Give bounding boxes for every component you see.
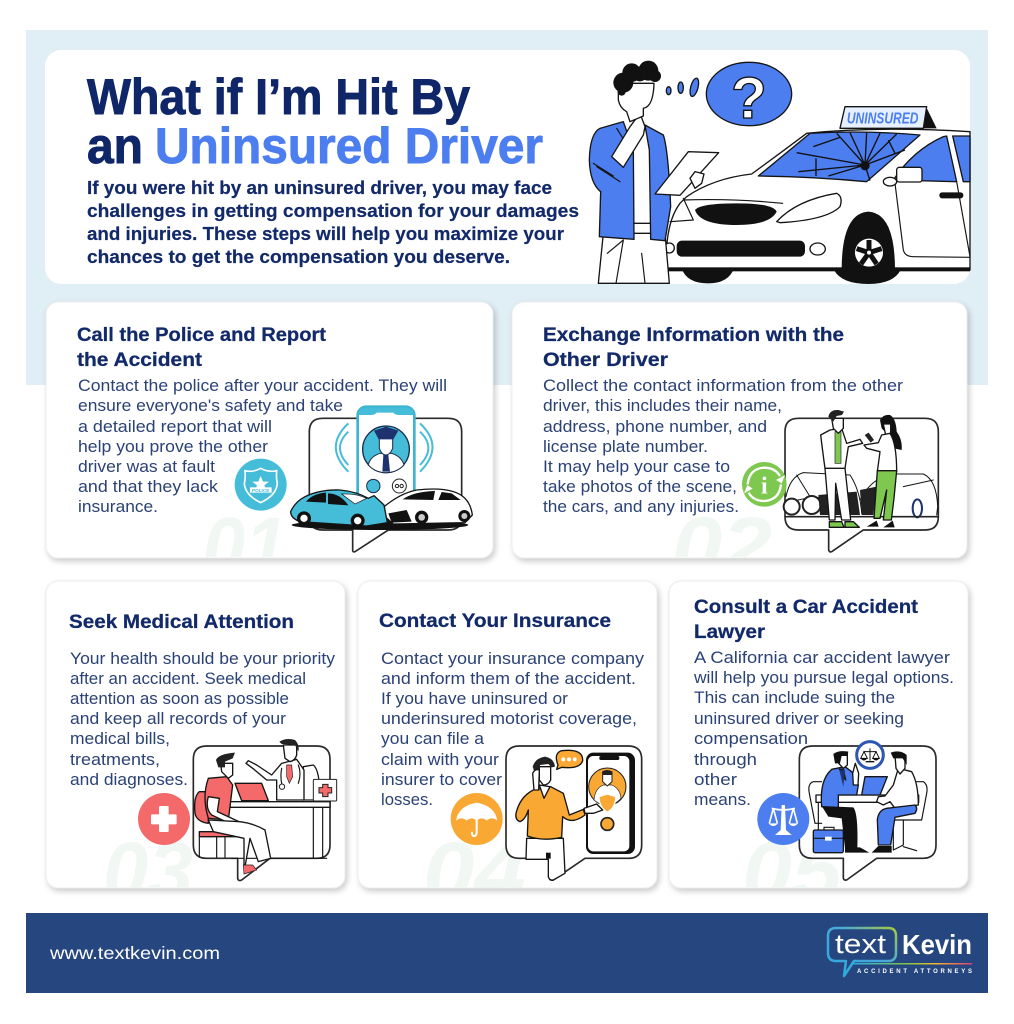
heading: Seek Medical Attention (69, 611, 294, 633)
illustration: doctor and patient at desk (193, 739, 337, 881)
person (589, 61, 719, 283)
icon: police badge: POLICE (252, 488, 269, 493)
uninsured sign: UNINSURED (847, 111, 919, 128)
body text: treatments, (70, 750, 160, 769)
body text: license plate number. (543, 437, 708, 456)
panel: step 3 seek medical attention (46, 581, 345, 917)
heading (543, 324, 844, 371)
body text: other (694, 770, 737, 789)
body text: claim with your (381, 750, 499, 769)
body text: and inform them of the accident. (381, 669, 636, 688)
intro text: chances to get the compensation you deserve. (87, 247, 510, 267)
panel: step 2 exchange information (512, 302, 967, 592)
body text (381, 649, 645, 809)
body text: help you prove the other (78, 437, 268, 456)
heading: Contact Your Insurance (379, 610, 611, 632)
heading: the Accident (77, 349, 203, 371)
body text: a detailed report that will (78, 417, 272, 436)
illustration: driver and damaged uninsured car (589, 61, 970, 284)
body text: It may help your case to (543, 457, 730, 476)
body text: uninsured driver or seeking (694, 709, 904, 728)
icon: information exchange (742, 462, 787, 507)
icon: police badge (235, 459, 287, 511)
illustration: lawyer meeting client (799, 742, 936, 880)
body text: and diagnoses. (70, 770, 188, 789)
body text: underinsured motorist coverage, (381, 709, 637, 728)
step number 03: 03 (103, 826, 193, 917)
logo: ACCIDENT ATTORNEYS (857, 969, 972, 975)
thought bubble with question mark: ? (731, 66, 767, 131)
step number 05: 05 (742, 826, 844, 917)
heading (694, 596, 919, 643)
body text: Your health should be your priority (70, 649, 336, 668)
body text (70, 649, 336, 789)
heading: Consult a Car Accident (694, 596, 919, 618)
body text: take photos of the scene, (543, 477, 737, 496)
step number 02: 02 (672, 501, 772, 592)
step number 01: 01 (203, 501, 287, 592)
heading: Exchange Information with the (543, 324, 844, 346)
illustration: two drivers exchanging information (784, 410, 938, 552)
heading: Lawyer (694, 621, 765, 643)
body text: A California car accident lawyer (694, 648, 950, 667)
intro text: challenges in getting compensation for your damages (87, 201, 579, 221)
body text: losses. (381, 790, 433, 809)
logo: text (835, 929, 887, 959)
body text (78, 376, 447, 516)
thought bubble with question mark (666, 62, 792, 131)
icon: information exchange: i (761, 473, 768, 499)
step number 04: 04 (423, 826, 526, 917)
body text: through (694, 750, 757, 769)
body text: address, phone number, and (543, 417, 767, 436)
title: Uninsured Driver (155, 118, 543, 174)
body text: attention as soon as possible (70, 689, 289, 708)
title: What if I’m Hit By (87, 69, 470, 125)
logo (828, 928, 972, 976)
intro text: If you were hit by an uninsured driver, you may face (87, 178, 552, 198)
logo: Kevin (902, 929, 972, 960)
illustration: police phone call and crashed cars (291, 407, 472, 552)
body text: compensation (694, 729, 808, 748)
body text: Contact the police after your accident. They will (78, 376, 447, 395)
light blue background panel (26, 30, 988, 385)
body text: medical bills, (70, 729, 170, 748)
body text: Contact your insurance company (381, 649, 645, 668)
icon: scales of justice (757, 793, 809, 845)
body text: and that they lack (78, 477, 219, 496)
body text (543, 376, 903, 516)
car (664, 129, 970, 284)
body text: ensure everyone's safety and take (78, 396, 343, 415)
icon: medical cross (138, 793, 190, 845)
body text: means. (694, 790, 751, 809)
icon: umbrella (451, 793, 503, 845)
illustration: man on phone with insurer (506, 746, 642, 880)
body text: If you have uninsured or (381, 689, 568, 708)
title: an (87, 118, 143, 174)
intro text: and injuries. These steps will help you maximize your (87, 224, 564, 244)
heading: Call the Police and Report (77, 324, 327, 346)
body text: Collect the contact information from the other (543, 376, 903, 395)
body text: insurance. (78, 497, 158, 516)
heading: Other Driver (543, 349, 668, 371)
body text: insurer to cover (381, 770, 502, 789)
intro text (87, 178, 579, 267)
body text: will help you pursue legal options. (693, 668, 954, 687)
body text: and keep all records of your (70, 709, 286, 728)
website url: www.textkevin.com (49, 943, 220, 963)
panel: step 5 consult a lawyer (669, 581, 968, 917)
panel: step 1 call the police (46, 302, 493, 592)
heading (77, 324, 327, 371)
body text: you can file a (381, 729, 485, 748)
body text: the cars, and any injuries. (543, 497, 739, 516)
footer bar (26, 913, 988, 993)
body text: This can include suing the (694, 688, 895, 707)
uninsured sign (840, 107, 937, 128)
body text: driver, this includes their name, (543, 396, 782, 415)
panel: header (45, 50, 970, 284)
panel: step 4 contact your insurance (358, 581, 657, 917)
body text: after an accident. Seek medical (70, 669, 306, 688)
title (87, 69, 543, 174)
body text: driver was at fault (78, 457, 215, 476)
body text (693, 648, 954, 809)
